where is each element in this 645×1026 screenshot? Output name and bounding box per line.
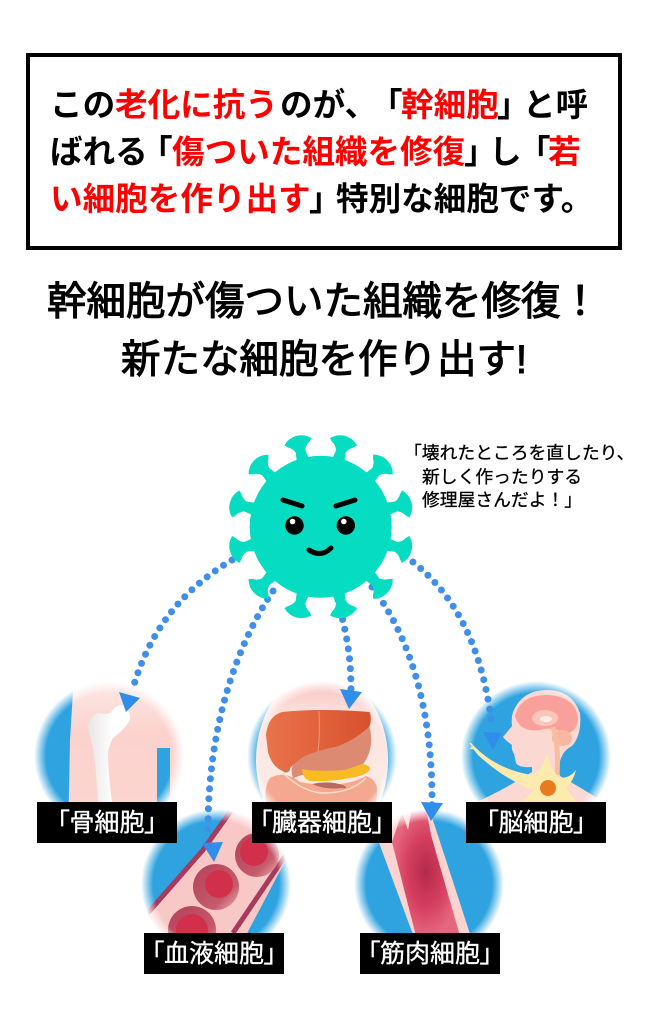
label: organ cell: 「臓器細胞」 [259, 809, 384, 837]
label: muscle cell [360, 933, 500, 974]
brain cell illustration [462, 682, 610, 802]
icon: intestines [266, 774, 377, 802]
label: brain cell [466, 802, 606, 843]
text block: explanation: 」 [464, 133, 497, 170]
arrow: stem cell to muscle cell [372, 587, 443, 821]
text block: explanation: のが、 [280, 86, 377, 123]
text block: explanation: 「 [370, 86, 403, 123]
label: brain cell: 「脳細胞」 [486, 809, 586, 837]
text block: explanation: 幹細胞 [401, 86, 499, 123]
icon: gallbladder [282, 768, 290, 772]
text block: explanation: と呼 [523, 86, 588, 123]
text block: explanation: 老化に抗う [115, 86, 278, 123]
text block: explanation: 傷ついた組織を修復 [172, 133, 465, 170]
panel: explanation box [26, 53, 622, 250]
icon: brain [515, 695, 578, 734]
icon: stem cell character [226, 432, 415, 621]
icon: liver [266, 710, 371, 772]
heading: 新たな細胞を作り出す! [121, 338, 527, 382]
icon: blood vessel [148, 812, 286, 933]
icon: red blood cells [193, 864, 239, 910]
heading [47, 280, 600, 382]
heading: 幹細胞が傷ついた組織を修復！ [47, 280, 600, 324]
icon: muscle [379, 812, 470, 933]
face: mouth [309, 548, 331, 554]
label: blood cell [144, 933, 284, 974]
text block: explanation: い細胞を作り出す [50, 180, 311, 217]
text block: explanation: 」 [497, 86, 530, 123]
speech text: 「壊れたところを直したり、 [404, 443, 634, 463]
text block: explanation: 「 [518, 133, 551, 170]
arrow: stem cell to brain cell [405, 556, 502, 750]
arrow: stem cell to bone cell [119, 560, 232, 712]
bone cell illustration [34, 684, 182, 802]
label: organ cell [252, 802, 392, 843]
speech text: 修理屋さんだよ！」 [422, 490, 582, 510]
illustration layer [34, 435, 610, 933]
organ cell illustration [248, 682, 396, 802]
text block: explanation: 若 [548, 133, 581, 170]
speech text [404, 443, 634, 510]
face: eyes [285, 516, 355, 535]
text block: explanation: この [50, 86, 115, 123]
arrow: stem cell to organ cell [338, 600, 362, 709]
speech text: 新しく作ったりする [422, 466, 582, 486]
icon: head silhouette [478, 690, 597, 802]
face: eyebrows [283, 500, 355, 506]
label: blood cell: 「血液細胞」 [151, 940, 276, 968]
icon: neuron [470, 745, 578, 805]
label: bone cell [37, 802, 177, 843]
icon: stomach [292, 722, 371, 778]
text block: explanation: ばれる [50, 133, 148, 170]
text block: explanation: 「 [140, 133, 173, 170]
text block: explanation: し [489, 133, 522, 170]
icon: bone [88, 705, 130, 802]
text block: explanation: 特別な細胞です。 [336, 180, 593, 217]
blood cell illustration [142, 810, 290, 933]
text block: explanation [50, 86, 593, 217]
text block: explanation: 」 [309, 180, 342, 217]
icon: pancreas [302, 764, 370, 781]
label: bone cell: 「骨細胞」 [57, 809, 157, 837]
arrow: stem cell to blood cell [202, 591, 273, 862]
muscle cell illustration [354, 810, 504, 933]
label: muscle cell: 「筋肉細胞」 [367, 940, 492, 968]
